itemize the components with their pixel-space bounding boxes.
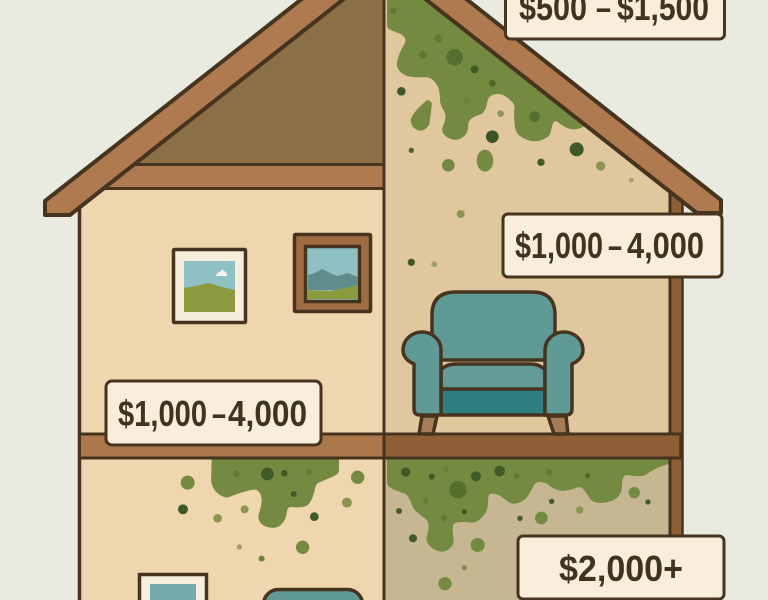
- center divider: [382, 0, 386, 600]
- price label: upper right room: $1,000: [515, 225, 603, 266]
- attic left: [137, 0, 384, 163]
- price label: attic: [506, 0, 724, 39]
- chair seat cushion: [441, 364, 545, 390]
- right arm: [545, 332, 583, 415]
- price label: upper left room: $1,000: [118, 393, 207, 434]
- chair back: [432, 292, 555, 360]
- price label: upper left room: [106, 381, 321, 445]
- armchair: [403, 292, 583, 434]
- price label: upper right room: 4,000: [627, 225, 704, 266]
- framed picture: mountains: [294, 234, 370, 312]
- mold spots: attic wall: [390, 7, 634, 267]
- framed picture: meadow: [174, 250, 246, 322]
- price label: upper right room: [503, 214, 722, 277]
- price label: lower right room: $2,000+: [559, 548, 683, 589]
- floor beam: [81, 433, 681, 459]
- chair front band: [441, 389, 545, 415]
- mold spots: lower left: [178, 468, 364, 562]
- mold patch: attic wall: [388, 0, 590, 140]
- lower right wall: [384, 459, 669, 600]
- mold patch: lower left: [212, 450, 338, 527]
- price label: upper right room: –: [608, 225, 622, 266]
- left roof: [45, 0, 345, 215]
- chair legs: [419, 416, 568, 434]
- price label: upper left room: –: [212, 393, 226, 434]
- price label: lower right room: [518, 536, 724, 599]
- attic beam: [100, 163, 384, 190]
- left arm: [403, 332, 441, 415]
- right wall post: [670, 190, 682, 600]
- lower framed picture: [140, 574, 206, 600]
- price label: upper left room: 4,000: [228, 393, 307, 434]
- left wall line: [78, 205, 81, 600]
- right upper wall with mold: [384, 0, 684, 434]
- lower armchair: [264, 590, 362, 600]
- mold spots: lower right: [396, 466, 651, 590]
- lower left wall: [80, 459, 384, 600]
- left upper wall: [80, 188, 384, 434]
- mold patch: lower right: [388, 450, 669, 551]
- right roof: [424, 0, 721, 213]
